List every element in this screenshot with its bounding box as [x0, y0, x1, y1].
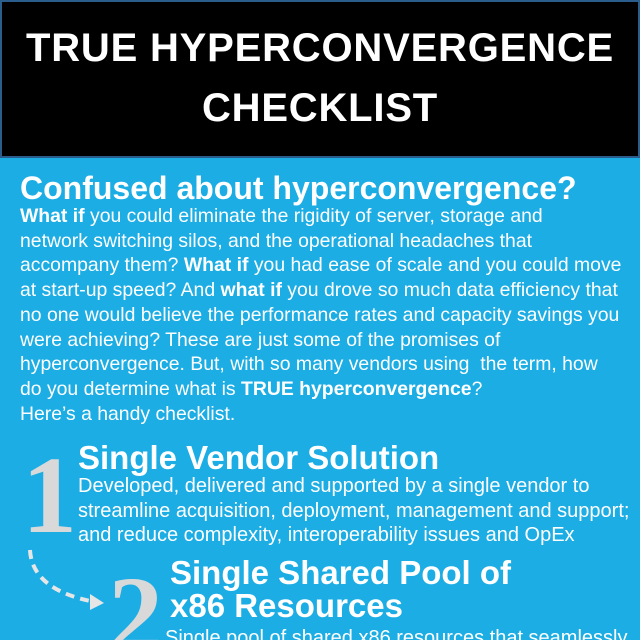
- intro heading: Confused about hyperconvergence?: [20, 170, 577, 206]
- intro text: Here’s a handy checklist.: [20, 403, 235, 425]
- arrow: dashed curve 1 to 2: [28, 550, 104, 610]
- intro text: no one would believe the performance rates and capacity savings you: [20, 304, 619, 326]
- title line 2: CHECKLIST: [202, 86, 438, 130]
- number 1: 1: [22, 434, 77, 556]
- intro text: What if you could eliminate the rigidity of server, storage and: [20, 205, 543, 227]
- title line 1: TRUE HYPERCONVERGENCE: [26, 26, 614, 70]
- intro text: accompany them? What if you had ease of scale and you could move: [20, 254, 621, 276]
- item 2 heading: Single Shared Pool of: [170, 554, 511, 591]
- item 1 text: and reduce complexity, interoperability issues and OpEx: [78, 524, 575, 546]
- item 1 heading: Single Vendor Solution: [78, 439, 439, 476]
- intro text: [20, 205, 621, 425]
- item 1 text: Developed, delivered and supported by a single vendor to: [78, 475, 589, 497]
- header banner: [0, 0, 640, 158]
- item 1 text: [78, 475, 629, 546]
- intro text: at start-up speed? And what if you drove so much data efficiency that: [20, 279, 618, 301]
- intro text: network switching silos, and the operational headaches that: [20, 230, 532, 252]
- item 1 text: streamline acquisition, deployment, management and support;: [78, 500, 629, 522]
- item 2 heading: x86 Resources: [170, 587, 403, 624]
- intro text: were achieving? These are just some of the promises of: [20, 329, 500, 351]
- intro text: hyperconvergence. But, with so many vendors using the term, how: [20, 353, 598, 375]
- item 2 heading: [170, 554, 512, 624]
- intro text: do you determine what is TRUE hyperconvergence?: [20, 378, 482, 400]
